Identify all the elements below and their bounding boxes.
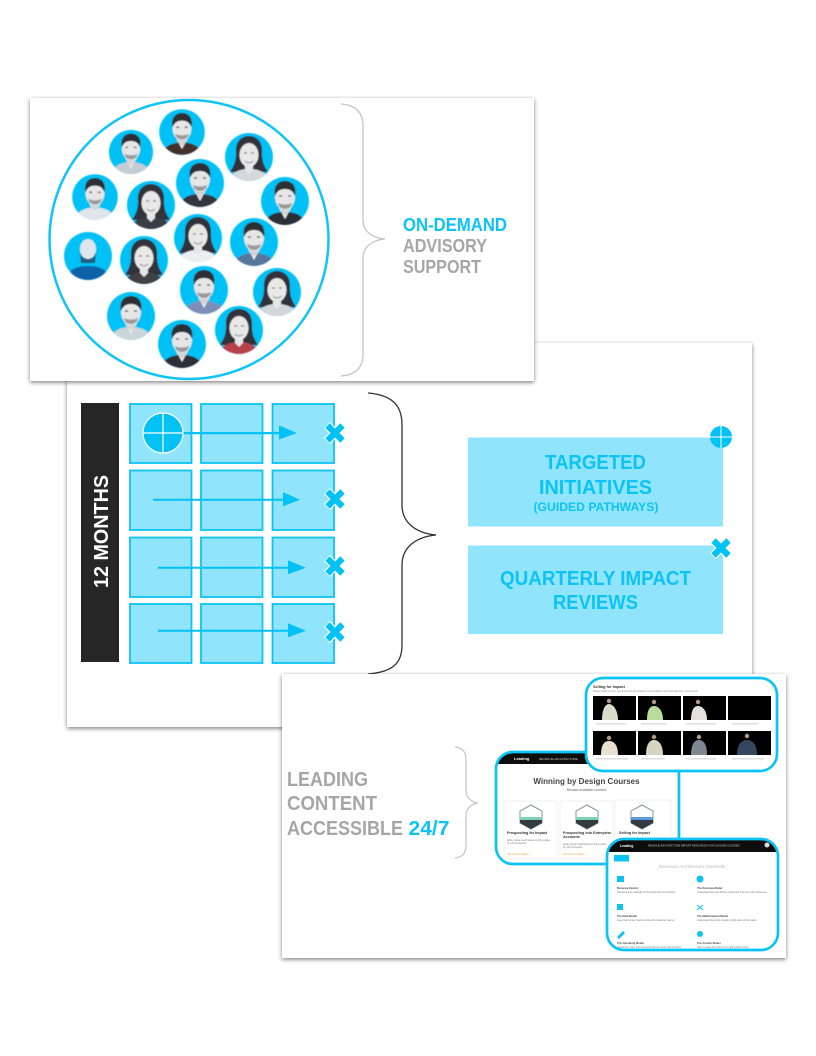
screenshot: courses page: Prospecting for Impact [507, 831, 548, 835]
heading: leading content accessible 24/7: 24/7 [408, 818, 450, 840]
screenshot: materials page [607, 839, 778, 950]
advisor circle [50, 100, 328, 379]
box: quarterly impact reviews [468, 540, 729, 634]
screenshot: materials page: Understand how you attract, impact and how you collect Revenue [697, 891, 767, 894]
screenshot: courses page: Winning by Design Courses [533, 777, 640, 786]
brace [341, 104, 385, 376]
heading: leading content accessible 24/7: CONTENT [287, 793, 377, 815]
screenshot: courses page: Browse available courses [567, 788, 607, 792]
screenshot: materials page: Revenue Factory [617, 886, 639, 890]
arrows across months [153, 426, 306, 637]
panel: on-demand advisory support [30, 98, 534, 381]
screenshot: courses page: Leading [514, 756, 530, 761]
heading: leading content accessible 24/7: ACCESSIBLE [287, 818, 403, 840]
grid of monthly cells [130, 404, 334, 663]
icon: initiative marker [143, 413, 183, 453]
heading: leading content accessible 24/7: LEADING [287, 769, 368, 791]
heading: leading content accessible 24/7 [287, 769, 450, 840]
screenshot: courses page: REVENUE ARCHITECTURE [539, 757, 578, 761]
screenshot: materials page: Leading [620, 844, 633, 848]
screenshot: materials page: The Growth Model [697, 941, 721, 945]
panel: 12 months program [67, 343, 752, 727]
screenshot: courses page: Apply proven techniques to bring value [507, 839, 551, 842]
label bar: 12 months: 12 MONTHS [91, 475, 113, 588]
screenshot: courses page: Selling for Impact [619, 831, 651, 835]
portrait: bearded advisor in blue [64, 232, 112, 281]
heading: on-demand advisory support: SUPPORT [403, 257, 481, 277]
screenshot: materials page: Understand Recurring Impact in both sides of the bowtie [697, 919, 757, 922]
screenshot: materials page: Keep track of key metrics across the customer journey [617, 919, 675, 922]
box: targeted initiatives [468, 426, 732, 526]
brace [368, 393, 436, 674]
screenshot: materials page: The Data Model [617, 914, 637, 918]
screenshot: courses page: Prospecting into Enterprise [563, 831, 611, 835]
screenshot: materials page: The Operating Model [617, 941, 644, 945]
screenshot: courses page: Apply proven techniques to bring value [563, 843, 607, 846]
screenshot: courses page: Accounts [563, 835, 580, 839]
label bar: 12 months [81, 403, 119, 662]
screenshot: courses page: Get Course Outline > [507, 853, 531, 856]
screenshot: video library: Selling for Impact [593, 685, 626, 689]
screenshot: courses page: to your prospects [507, 842, 527, 845]
screenshot: materials page: How to scale with tools in the right growth motion [697, 946, 749, 949]
screenshot: materials page: Operations, roles and ownership across teams and functions [617, 946, 682, 949]
heading: on-demand advisory support [403, 215, 507, 277]
screenshot: materials page: The Mathematical Model [697, 914, 728, 918]
screenshot: materials page: Revenue Architecture Materials [659, 864, 726, 870]
screenshot: video library: Master skills for your next level through effective conversations and build discovery and service [593, 690, 699, 693]
icons: review crosses [327, 425, 343, 640]
box: targeted initiatives: INITIATIVES [539, 477, 652, 499]
screenshot: materials page: Research and materials for the whole Revenue Factory [617, 891, 676, 894]
screenshot: courses page: to your prospects [563, 846, 583, 849]
panel: leading content [282, 674, 786, 958]
box: quarterly impact reviews: QUARTERLY IMPACT [500, 568, 691, 590]
screenshot: materials page: REVENUE ARCHITECTURE REPORT RESOURCES FOR COACHES COURSES [648, 844, 740, 848]
box: quarterly impact reviews: REVIEWS [553, 592, 638, 614]
box: targeted initiatives: TARGETED [545, 452, 646, 474]
advisor portraits [64, 109, 309, 369]
box: targeted initiatives: (GUIDED PATHWAYS) [534, 500, 658, 514]
screenshot: courses page [496, 752, 679, 864]
screenshot: courses page: Get Course Outline > [563, 853, 587, 856]
screenshot: video library [586, 678, 777, 771]
brace [455, 747, 477, 858]
heading: on-demand advisory support: ON-DEMAND [403, 215, 507, 235]
screenshot: materials page: The Revenue Model [697, 886, 722, 890]
heading: on-demand advisory support: ADVISORY [403, 236, 487, 256]
